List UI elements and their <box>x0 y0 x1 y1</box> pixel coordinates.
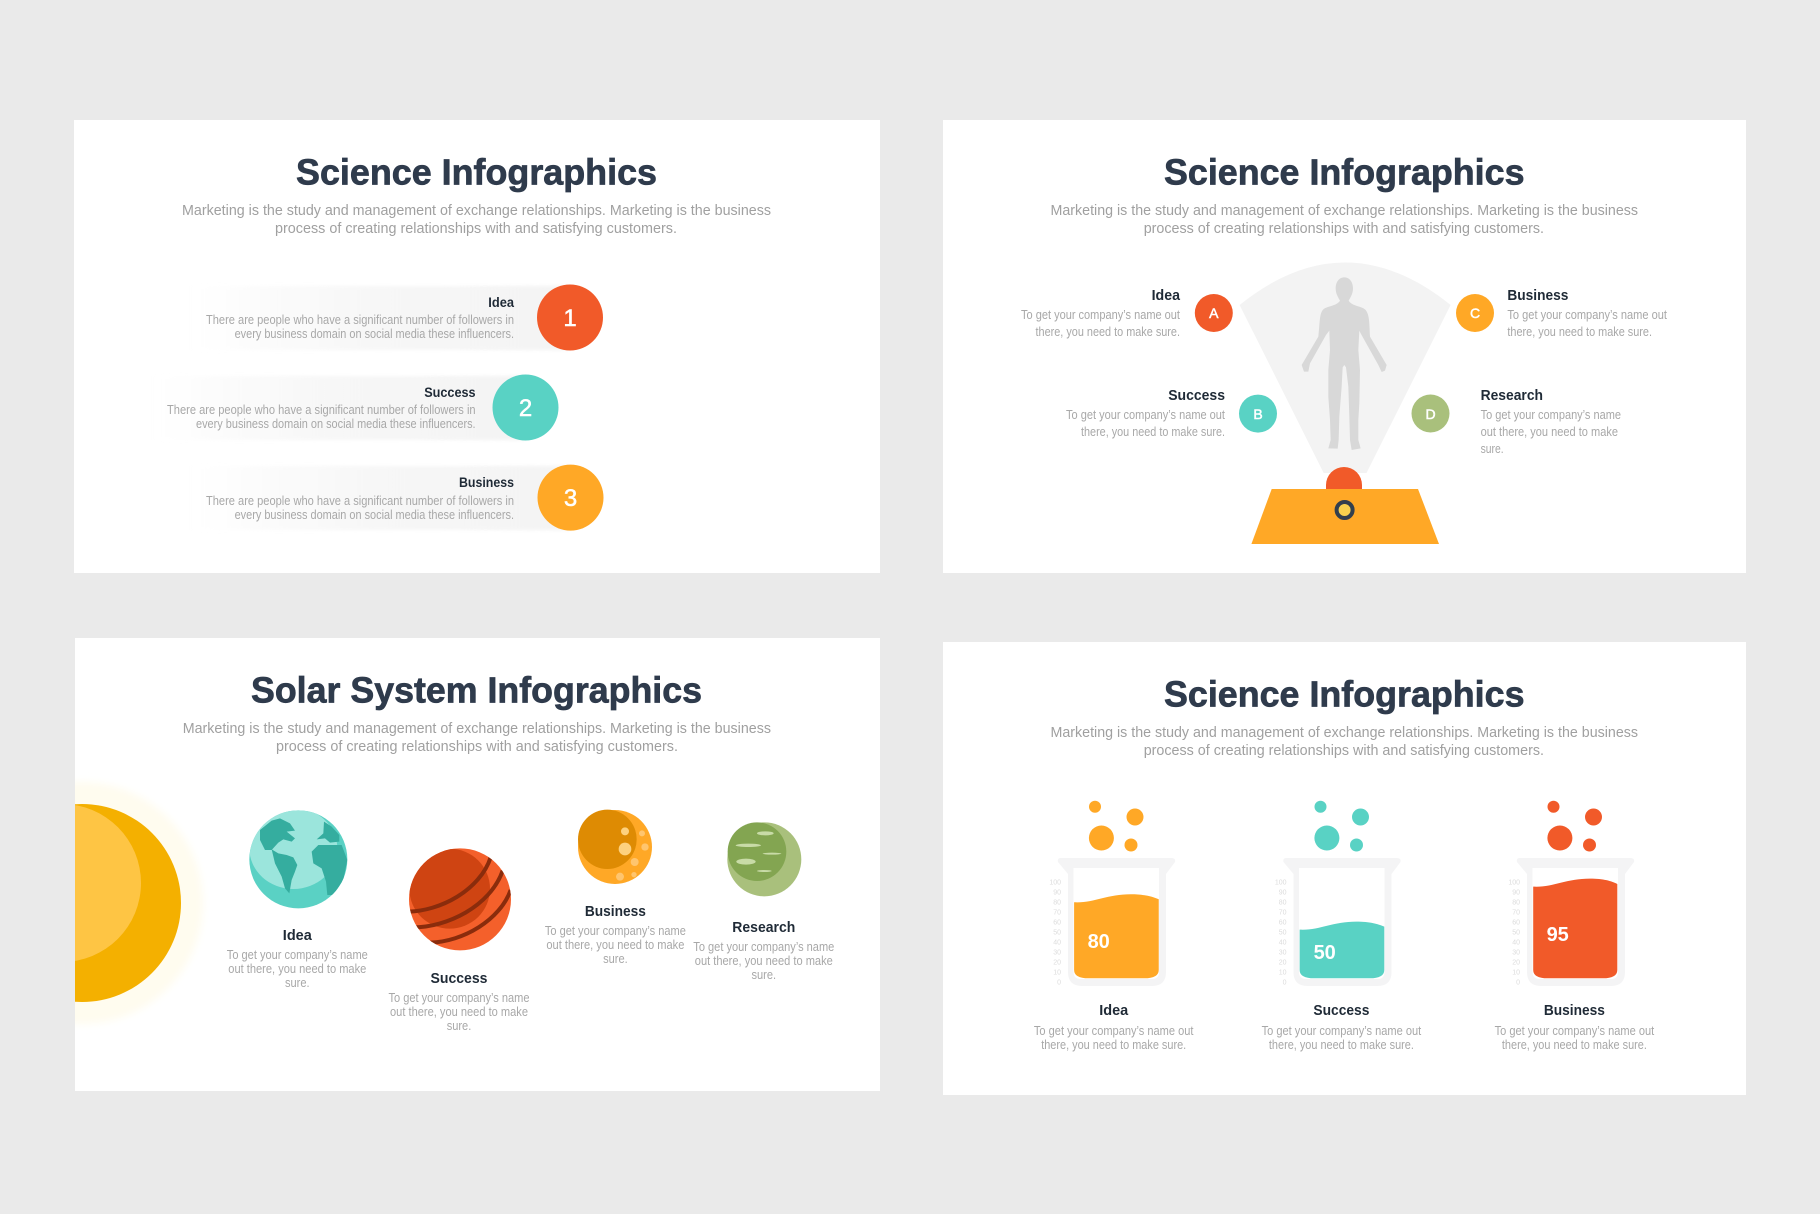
label: research: sure. <box>752 967 776 982</box>
item C: business: there, you need to make sure. <box>1507 324 1652 339</box>
label: idea: Idea <box>283 927 312 944</box>
beaker 2: 50: 50 <box>1314 942 1336 964</box>
subtitle <box>1050 202 1638 237</box>
beaker 2: 50 <box>1275 801 1401 986</box>
beaker 1: 80: 80 <box>1053 900 1061 906</box>
row 3: business: There are people who have a significant number of followers in <box>206 493 514 508</box>
projector lens <box>1337 502 1353 518</box>
subtitle: process of creating relationships with and satisfying customers. <box>1144 742 1544 759</box>
planet: earth <box>249 808 347 908</box>
label: business <box>1495 1002 1655 1052</box>
planet: green <box>727 822 801 896</box>
label: business <box>545 903 686 966</box>
title: Solar System Infographics <box>251 670 702 710</box>
subtitle: Marketing is the study and management of exchange relationships. Marketing is the business <box>183 720 771 737</box>
label: success: To get your company’s name out <box>1262 1023 1422 1038</box>
item D: research <box>1412 387 1621 456</box>
item C: business <box>1456 287 1667 339</box>
beaker 3: 95: 70 <box>1512 910 1520 916</box>
item D: research: out there, you need to make <box>1481 424 1618 439</box>
beaker 3: 95: 0 <box>1516 980 1520 986</box>
label: success: To get your company’s name <box>388 990 530 1005</box>
beaker 1: 80: 50 <box>1053 930 1061 936</box>
row 2: success: There are people who have a significant number of followers in <box>167 402 476 417</box>
row 1: idea: every business domain on social media these influencers. <box>235 326 514 341</box>
beaker 3: 95: 90 <box>1512 890 1520 896</box>
label: idea: sure. <box>285 975 310 990</box>
row 3: business <box>190 465 604 531</box>
beaker 3: 95: 100 <box>1508 880 1520 886</box>
panel: numbered list <box>74 120 880 573</box>
row 2: success: 2 <box>519 395 532 422</box>
label: idea: there, you need to make sure. <box>1041 1037 1186 1052</box>
label: business: To get your company’s name <box>545 923 686 938</box>
item D: research: To get your company’s name <box>1481 407 1621 422</box>
row 2: success: Success <box>424 384 476 400</box>
item B: success <box>1066 387 1277 439</box>
beaker 1: 80: 10 <box>1053 970 1061 976</box>
label: idea: out there, you need to make <box>228 961 366 976</box>
beaker 3: 95: 20 <box>1512 960 1520 966</box>
row 3: business: 3 <box>564 485 577 512</box>
item A: idea: A <box>1209 305 1219 321</box>
panel: solar system <box>0 638 880 1091</box>
subtitle <box>1050 724 1638 759</box>
subtitle: process of creating relationships with and satisfying customers. <box>275 220 677 237</box>
projector dome <box>1326 467 1362 490</box>
beaker 1: 80: 30 <box>1053 950 1061 956</box>
beaker 2: 50: 100 <box>1275 880 1287 886</box>
row 1: idea: Idea <box>488 294 514 310</box>
beaker 2: 50: 30 <box>1279 950 1287 956</box>
subtitle: Marketing is the study and management of exchange relationships. Marketing is the business <box>182 202 771 219</box>
label: idea: To get your company’s name <box>227 947 368 962</box>
title: Science Infographics <box>1164 674 1524 714</box>
label: business: out there, you need to make <box>546 937 684 952</box>
beaker 1: 80 <box>1049 801 1175 986</box>
label: success: there, you need to make sure. <box>1269 1037 1414 1052</box>
beaker 3: 95: 40 <box>1512 940 1520 946</box>
row 2: success: every business domain on social media these influencers. <box>196 416 476 431</box>
label: success: Success <box>1313 1002 1369 1019</box>
item B: success: there, you need to make sure. <box>1081 424 1225 439</box>
beaker 2: 50: 20 <box>1279 960 1287 966</box>
beaker 3: 95: 10 <box>1512 970 1520 976</box>
subtitle <box>183 720 771 755</box>
item D: research: D <box>1425 406 1436 422</box>
label: research: out there, you need to make <box>695 953 833 968</box>
label: idea: To get your company’s name out <box>1034 1023 1194 1038</box>
beaker 3: 95: 60 <box>1512 920 1520 926</box>
row 3: business: Business <box>459 474 514 490</box>
item A: idea: there, you need to make sure. <box>1036 324 1180 339</box>
beaker 1: 80: 80 <box>1088 931 1110 953</box>
subtitle: process of creating relationships with and satisfying customers. <box>276 738 678 755</box>
row 2: success <box>152 374 558 440</box>
beaker 3: 95: 50 <box>1512 930 1520 936</box>
beaker 2: 50: 40 <box>1279 940 1287 946</box>
planet: orange <box>578 810 652 884</box>
label: research: Research <box>732 919 795 936</box>
item C: business: C <box>1470 305 1480 321</box>
label: success <box>388 970 530 1033</box>
item B: success: Success <box>1168 387 1225 404</box>
item C: business: Business <box>1507 287 1568 304</box>
panel: beakers <box>943 642 1746 1095</box>
item C: business: To get your company’s name out <box>1507 307 1667 322</box>
light beam <box>1240 262 1451 473</box>
title: Science Infographics <box>296 152 657 192</box>
beaker 2: 50: 0 <box>1283 980 1287 986</box>
item B: success: To get your company’s name out <box>1066 407 1225 422</box>
projector base <box>1251 489 1439 544</box>
beaker 2: 50: 80 <box>1279 900 1287 906</box>
human silhouette <box>1302 277 1387 450</box>
beaker 2: 50: 90 <box>1279 890 1287 896</box>
label: success: sure. <box>447 1018 471 1033</box>
label: business: sure. <box>603 951 628 966</box>
beaker 2: 50: 60 <box>1279 920 1287 926</box>
subtitle: process of creating relationships with and satisfying customers. <box>1144 220 1544 237</box>
row 1: idea: 1 <box>563 305 577 332</box>
label: idea <box>1034 1002 1194 1052</box>
subtitle: Marketing is the study and management of exchange relationships. Marketing is the business <box>1050 202 1638 219</box>
beaker 1: 80: 20 <box>1053 960 1061 966</box>
subtitle: Marketing is the study and management of exchange relationships. Marketing is the business <box>1050 724 1638 741</box>
beaker 3: 95: 80 <box>1512 900 1520 906</box>
beaker 3: 95: 95 <box>1547 924 1569 946</box>
label: idea: Idea <box>1099 1002 1129 1019</box>
beaker 1: 80: 60 <box>1053 920 1061 926</box>
item D: research: Research <box>1481 387 1543 404</box>
panel: human projection <box>943 120 1746 573</box>
item A: idea: Idea <box>1152 287 1181 304</box>
label: success: Success <box>430 970 488 987</box>
beaker 1: 80: 100 <box>1049 880 1061 886</box>
beaker 3: 95: 30 <box>1512 950 1520 956</box>
row 1: idea <box>190 284 603 350</box>
item D: research: sure. <box>1481 441 1504 456</box>
beaker 1: 80: 0 <box>1057 980 1061 986</box>
beaker 1: 80: 40 <box>1053 940 1061 946</box>
beaker 2: 50: 70 <box>1279 910 1287 916</box>
subtitle <box>182 202 771 237</box>
label: success <box>1262 1002 1422 1052</box>
beaker 2: 50: 10 <box>1279 970 1287 976</box>
beaker 1: 80: 70 <box>1053 910 1061 916</box>
beaker 1: 80: 90 <box>1053 890 1061 896</box>
label: research <box>693 919 834 982</box>
beaker 2: 50: 50 <box>1279 930 1287 936</box>
sun <box>75 782 203 1024</box>
label: business: To get your company’s name out <box>1495 1023 1655 1038</box>
label: business: Business <box>585 903 646 920</box>
planet: red <box>407 848 511 950</box>
label: business: there, you need to make sure. <box>1502 1037 1647 1052</box>
row 3: business: every business domain on social media these influencers. <box>235 507 514 522</box>
item A: idea <box>1021 287 1233 339</box>
item B: success: B <box>1253 406 1263 422</box>
label: research: To get your company’s name <box>693 939 834 954</box>
beaker 3: 95 <box>1508 801 1634 986</box>
row 1: idea: There are people who have a significant number of followers in <box>206 312 514 327</box>
label: success: out there, you need to make <box>390 1004 528 1019</box>
label: idea <box>227 927 368 990</box>
title: Science Infographics <box>1164 152 1524 192</box>
label: business: Business <box>1544 1002 1605 1019</box>
item A: idea: To get your company’s name out <box>1021 307 1180 322</box>
